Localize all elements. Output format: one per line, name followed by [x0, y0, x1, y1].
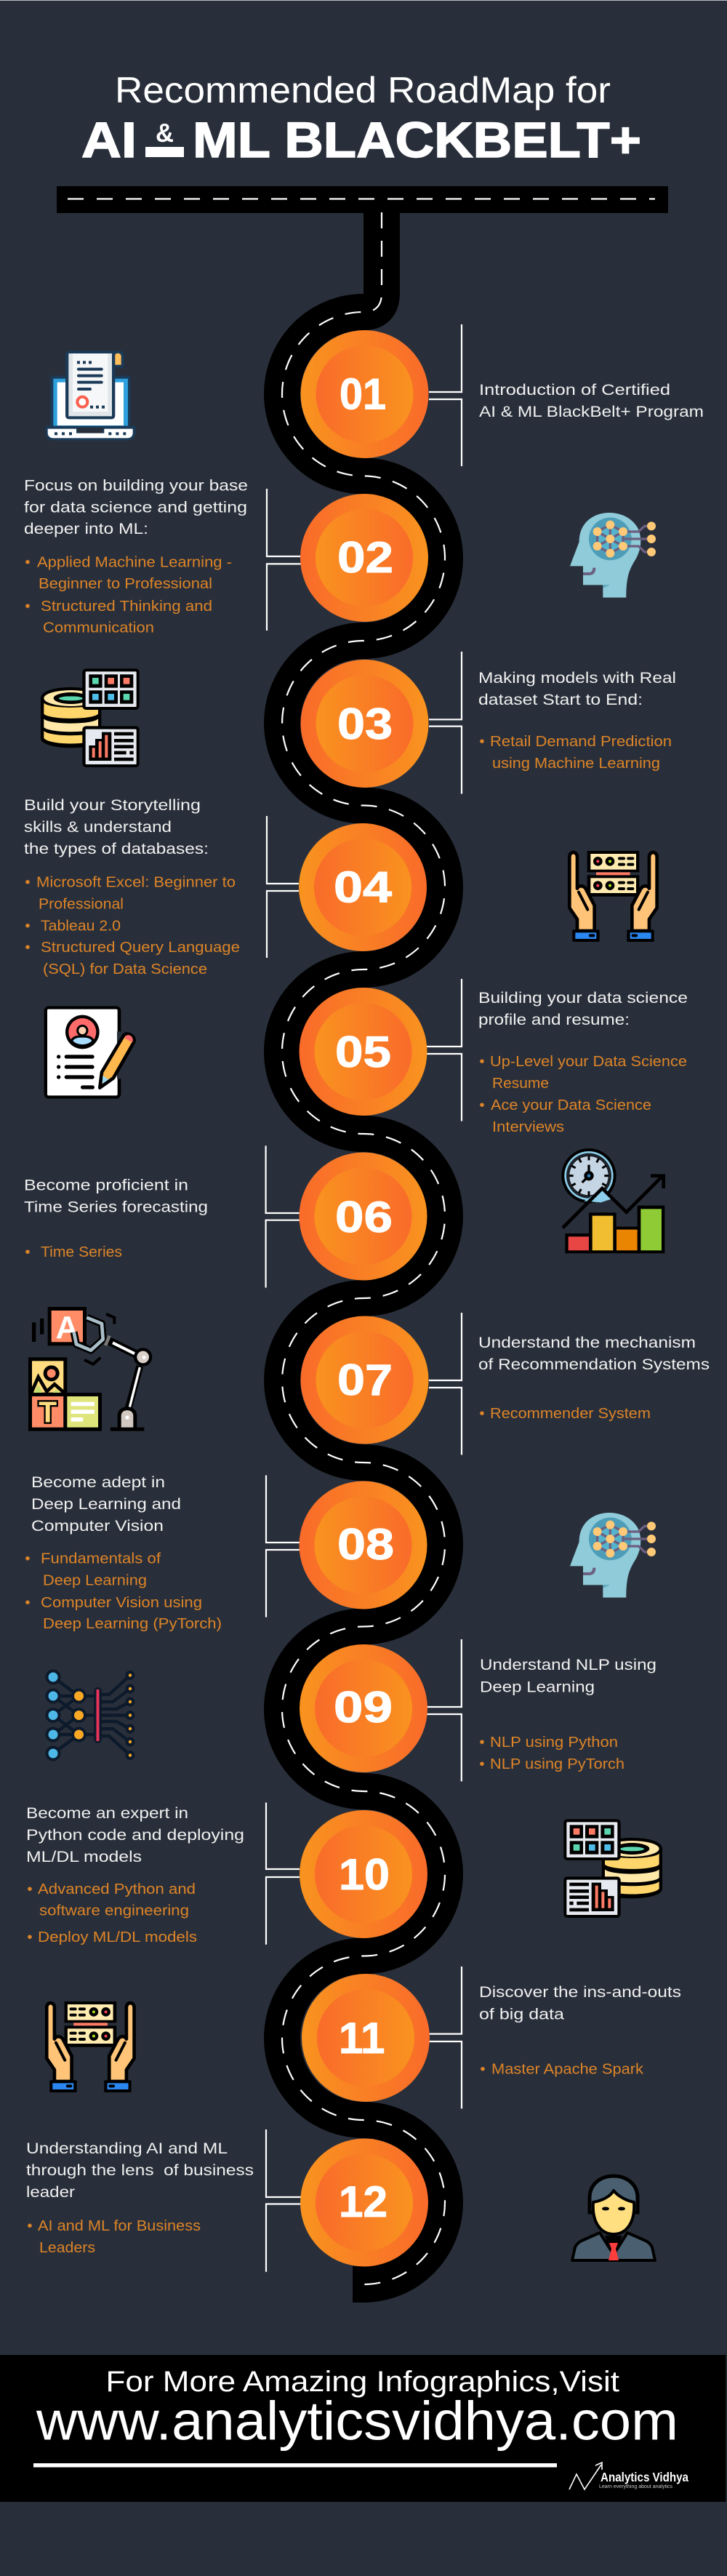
badge 04 — [299, 823, 427, 951]
text 03: • — [479, 733, 485, 750]
step 07 — [28, 1307, 710, 1455]
text 08: Computer Vision — [31, 1517, 164, 1535]
icon: robot arm with blocks — [28, 1307, 152, 1431]
text 11 — [479, 1983, 681, 2077]
connector 06 — [266, 1145, 300, 1287]
connector 08 — [266, 1475, 300, 1617]
text 01 — [479, 381, 704, 420]
text 09: Deep Learning — [480, 1679, 595, 1696]
text 09: • — [479, 1756, 485, 1772]
text 08: Fundamentals of — [41, 1551, 161, 1567]
badge 11: 11 — [339, 2014, 385, 2063]
logo: Analytics Vidhya: Analytics Vidhya — [601, 2470, 688, 2484]
text 05: • — [479, 1053, 485, 1070]
text 12: AI and ML for Business — [38, 2217, 201, 2234]
badge 08 — [300, 1481, 427, 1609]
badge 06: 06 — [335, 1193, 393, 1241]
text 10: • — [27, 1881, 33, 1897]
connector 09 — [427, 1639, 462, 1781]
text 08: Deep Learning — [43, 1572, 147, 1588]
text 02: Applied Machine Learning - — [37, 554, 232, 570]
badge 10: 10 — [339, 1850, 390, 1899]
text 02: for data science and getting — [24, 499, 247, 516]
connector 03 — [429, 652, 462, 794]
text 01: AI & ML BlackBelt+ Program — [479, 403, 704, 420]
title line 2: & — [156, 118, 174, 148]
icon: hands holding servers — [569, 851, 657, 942]
badge 01 — [301, 330, 429, 458]
text 04: • — [25, 918, 31, 934]
step 09 — [45, 1639, 656, 1781]
text 12: Understanding AI and ML — [26, 2140, 228, 2157]
footer line: website: www.analyticsvidhya.com — [36, 2390, 678, 2451]
text 04: skills & understand — [24, 818, 172, 836]
step 12 — [26, 2129, 655, 2272]
connector 02 — [267, 489, 301, 631]
text 09: Understand NLP using — [480, 1656, 656, 1673]
icon: database and tables — [41, 668, 140, 767]
text 08: Deep Learning (PyTorch) — [43, 1615, 222, 1632]
step 11 — [47, 1967, 681, 2108]
badge 03 — [301, 660, 429, 788]
text 11: • — [480, 2061, 486, 2077]
text 10: Deploy ML/DL models — [38, 1929, 197, 1945]
text 11: of big data — [479, 2006, 564, 2023]
text 03: Retail Demand Prediction — [490, 733, 672, 750]
logo: Analytics Vidhya: Learn everything about analytics — [599, 2484, 672, 2489]
text 02: Communication — [43, 620, 154, 636]
text 07 — [478, 1334, 710, 1422]
text 10: • — [27, 1929, 33, 1945]
footer rule — [33, 2463, 557, 2467]
title — [81, 70, 641, 168]
icon: AI head repeat — [570, 1513, 656, 1598]
text 09: NLP using PyTorch — [490, 1756, 624, 1772]
text 08: • — [25, 1551, 31, 1567]
road surface — [282, 211, 445, 2284]
text 02: Beginner to Professional — [39, 575, 212, 592]
badge 03: 03 — [337, 700, 393, 748]
text 05: Building your data science — [478, 989, 688, 1007]
title line 2: ML BLACKBELT+ — [193, 112, 641, 168]
winding road — [57, 186, 668, 2284]
text 04: • — [25, 874, 31, 890]
text 06 — [24, 1177, 208, 1260]
text 02: Structured Thinking and — [41, 598, 212, 615]
text 06: • — [25, 1244, 31, 1260]
step 06 — [24, 1145, 664, 1287]
connector 01 — [429, 324, 462, 466]
icon: clock and bar chart — [561, 1148, 664, 1253]
text 01: Introduction of Certified — [479, 381, 670, 399]
text 11: Master Apache Spark — [491, 2061, 644, 2077]
step 03 — [41, 652, 676, 794]
text 03: dataset Start to End: — [478, 691, 643, 708]
text 08: Computer Vision using — [41, 1594, 202, 1611]
text 04 — [24, 796, 240, 977]
icon: database and tables mirrored — [563, 1819, 662, 1918]
text 10: Advanced Python and — [38, 1881, 196, 1897]
icon: AI head — [570, 513, 656, 598]
connector 07 — [429, 1313, 462, 1455]
badge 05 — [300, 988, 427, 1116]
badge 08: 08 — [337, 1520, 394, 1569]
horizontal road bar — [57, 186, 668, 213]
text 06: Time Series — [41, 1244, 122, 1260]
text 04: the types of databases: — [24, 840, 209, 857]
badge 06 — [300, 1152, 427, 1280]
text 11: Discover the ins-and-outs — [479, 1983, 681, 2001]
text 04: Structured Query Language — [41, 939, 240, 956]
text 06: Become proficient in — [24, 1177, 188, 1194]
text 07: Understand the mechanism — [478, 1334, 696, 1351]
text 08: Become adept in — [31, 1473, 165, 1491]
badge 12 — [300, 2138, 428, 2266]
text 04: Tableau 2.0 — [41, 918, 121, 934]
connector 12 — [266, 2129, 301, 2272]
text 10: Become an expert in — [26, 1804, 188, 1822]
text 05: Resume — [492, 1075, 549, 1092]
text 12: leader — [26, 2183, 75, 2201]
text 05: Up-Level your Data Science — [490, 1053, 687, 1070]
text 05: Interviews — [492, 1119, 564, 1135]
text 03: using Machine Learning — [492, 755, 660, 772]
text 10: Python code and deploying — [26, 1826, 244, 1844]
step 02 — [24, 477, 656, 636]
text 12: Leaders — [39, 2239, 95, 2256]
text 12: • — [27, 2217, 33, 2234]
footer line: call to action: For More Amazing Infographics,Visit — [106, 2366, 619, 2398]
badge 09: 09 — [334, 1683, 393, 1732]
title line 1: Recommended RoadMap for — [115, 70, 611, 111]
road centre dashes — [282, 212, 445, 2284]
connector 05 — [427, 979, 462, 1121]
text 09 — [479, 1656, 656, 1772]
text 07: • — [479, 1405, 485, 1422]
text 09: • — [479, 1734, 485, 1751]
text 05 — [478, 989, 688, 1135]
connector 10 — [266, 1802, 300, 1945]
step 04 — [24, 796, 657, 977]
text 04: (SQL) for Data Science — [43, 961, 207, 977]
title line 2: AI — [81, 112, 137, 168]
text 07: Recommender System — [490, 1405, 651, 1422]
text 02: deeper into ML: — [24, 520, 148, 537]
step 01 — [46, 324, 704, 466]
connector 11 — [429, 1967, 462, 2108]
text 12: through the lens of business — [26, 2161, 254, 2179]
text 12 — [26, 2140, 254, 2256]
badge 07 — [301, 1316, 429, 1444]
text 07: of Recommendation Systems — [478, 1356, 710, 1373]
badge 05: 05 — [335, 1028, 391, 1076]
text 04: Build your Storytelling — [24, 796, 201, 814]
text 03: Making models with Real — [478, 669, 676, 687]
step 05 — [44, 979, 688, 1135]
badge 02: 02 — [337, 533, 393, 582]
footer band — [0, 2355, 726, 2502]
text 02 — [24, 477, 248, 636]
text 06: Time Series forecasting — [24, 1199, 208, 1216]
text 04: • — [25, 939, 31, 956]
badge 04: 04 — [334, 863, 393, 912]
text 08: Deep Learning and — [31, 1495, 181, 1513]
text 02: • — [25, 598, 31, 615]
text 04: Microsoft Excel: Beginner to — [36, 874, 236, 890]
text 05: Ace your Data Science — [491, 1097, 651, 1113]
icon: businessman — [572, 2176, 655, 2260]
text 02: Focus on building your base — [24, 477, 248, 495]
icon: resume and pencil — [44, 1006, 134, 1099]
step 10 — [26, 1802, 662, 1945]
badge 12: 12 — [339, 2177, 387, 2226]
text 10: ML/DL models — [26, 1848, 142, 1865]
text 09: NLP using Python — [490, 1734, 618, 1751]
text 10 — [26, 1804, 244, 1945]
step 08 — [25, 1473, 656, 1632]
logo: Analytics Vidhya — [569, 2463, 688, 2489]
icon: robot arm with blocks: T — [39, 1396, 57, 1429]
icon: laptop with document — [46, 351, 136, 441]
badge 07: 07 — [337, 1356, 393, 1404]
text 05: • — [479, 1097, 485, 1113]
text 08: • — [25, 1594, 31, 1611]
icon: hands holding servers mirrored — [47, 2001, 134, 2092]
badge 09 — [300, 1644, 427, 1772]
connector 04 — [267, 816, 299, 958]
text 03 — [478, 669, 676, 772]
icon: neural network — [45, 1670, 135, 1761]
badge 01: 01 — [340, 369, 386, 419]
badge 10 — [300, 1810, 427, 1938]
icon: robot arm with blocks: A — [56, 1311, 79, 1345]
text 10: software engineering — [39, 1903, 189, 1919]
text 02: • — [25, 554, 31, 570]
badge 11 — [302, 1974, 430, 2102]
text 04: Professional — [39, 896, 124, 912]
text 08 — [25, 1473, 222, 1632]
text 05: profile and resume: — [478, 1011, 630, 1028]
badge 02 — [300, 494, 428, 622]
